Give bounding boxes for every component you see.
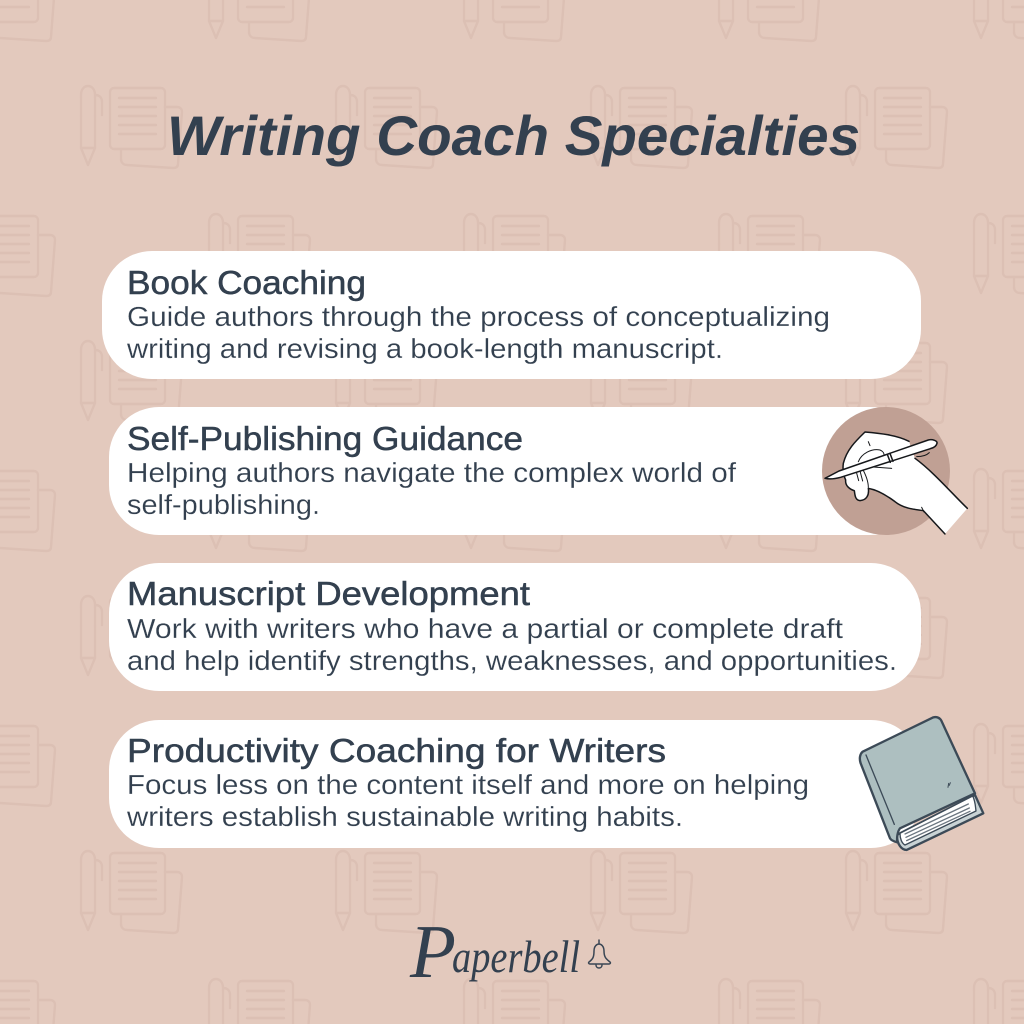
icon: bell — [589, 940, 610, 968]
logo: Paperbell wordmark — [409, 910, 610, 994]
panel: manuscript development — [109, 563, 921, 691]
panel: self-publishing guidance: self-publishing. — [127, 489, 320, 520]
panel: book coaching: writing and revising a book-length manuscript. — [126, 333, 723, 364]
panel: book coaching: Guide authors through the process of conceptualizing — [127, 301, 830, 332]
panel: self-publishing guidance: Helping authors navigate the complex world of — [127, 457, 736, 488]
icon: closed book — [860, 717, 983, 850]
panel: self-publishing guidance: Self-Publishing Guidance — [127, 420, 523, 457]
panel: productivity coaching — [109, 720, 921, 848]
panel: book coaching — [102, 251, 921, 379]
panel: self-publishing guidance — [109, 407, 921, 535]
logo: Paperbell wordmark: aperbell — [452, 931, 580, 982]
panel: productivity coaching: Focus less on the content itself and more on helping — [127, 769, 809, 800]
panel: manuscript development: and help identify strengths, weaknesses, and opportunities. — [127, 645, 897, 676]
panel: book coaching: Book Coaching — [127, 264, 366, 301]
panel: productivity coaching: Productivity Coaching for Writers — [127, 732, 666, 769]
icon: hand writing with pen — [822, 407, 967, 535]
panel: manuscript development: Work with writers who have a partial or complete draft — [127, 613, 843, 644]
logo: Paperbell wordmark: P — [409, 910, 456, 994]
panel: manuscript development: Manuscript Development — [127, 575, 530, 612]
panel: productivity coaching: writers establish sustainable writing habits. — [126, 801, 683, 832]
title: Writing Coach Specialties — [167, 104, 860, 167]
